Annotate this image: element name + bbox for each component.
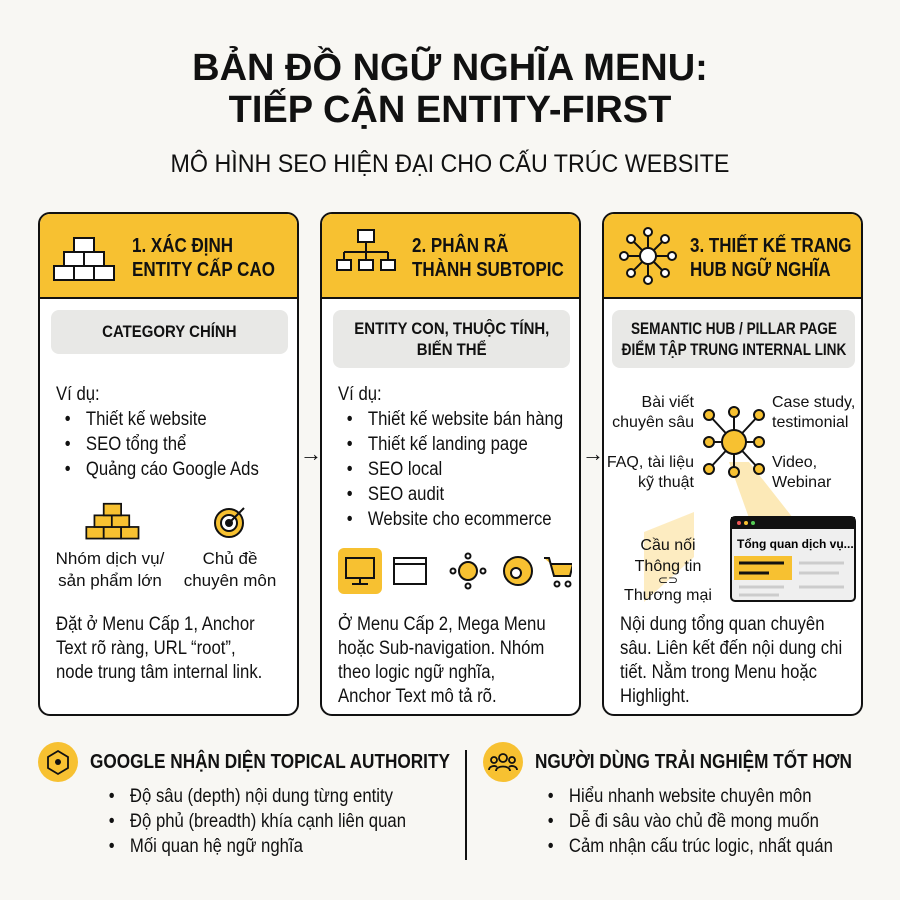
hub diagram: [607, 394, 856, 604]
caption: topic: chuyên môn: [184, 571, 276, 590]
examples 2: Thiết kế landing page: [368, 434, 528, 455]
label: semantic hub: SEMANTIC HUB / PILLAR PAGE: [631, 319, 837, 338]
hub diagram: Video,: [772, 454, 817, 471]
hub diagram: Cầu nối: [640, 537, 696, 554]
hub diagram: Thương mại: [624, 587, 712, 604]
examples 2: Thiết kế website bán hàng: [368, 409, 563, 430]
examples 1: Thiết kế website: [86, 409, 207, 430]
panel: 1: [38, 212, 299, 716]
hub diagram: FAQ, tài liệu: [607, 454, 694, 471]
caption: groups: Nhóm dịch vụ/: [56, 549, 164, 568]
icon: users: [483, 742, 523, 782]
caption: groups: sản phẩm lớn: [58, 571, 162, 590]
header 2: [322, 214, 579, 299]
label: category: CATEGORY CHÍNH: [102, 322, 237, 341]
header text 3: 3. THIẾT KẾ TRANG: [690, 235, 852, 257]
label: semantic hub: ĐIỂM TẬP TRUNG INTERNAL LINK: [622, 340, 846, 359]
bullets: Mối quan hệ ngữ nghĩa: [130, 836, 303, 857]
examples 2: SEO local: [368, 459, 442, 480]
header text 2: THÀNH SUBTOPIC: [412, 259, 564, 281]
caption: topic: Chủ đề: [203, 549, 257, 568]
arrow 2: →: [582, 441, 604, 466]
hub diagram: testimonial: [772, 414, 848, 431]
note 1: node trung tâm internal link.: [56, 662, 262, 683]
panel: 2: [320, 212, 581, 716]
note 1: Đặt ở Menu Cấp 1, Anchor: [56, 614, 255, 635]
icon: hierarchy: [336, 229, 396, 271]
label: entity con: [333, 310, 570, 368]
note 2: theo logic ngữ nghĩa,: [338, 662, 495, 683]
examples 1: Ví dụ:: [56, 384, 100, 405]
icon: target: [214, 507, 245, 538]
title: [192, 46, 708, 131]
header 1: [40, 214, 297, 299]
note 3: [620, 614, 842, 707]
hub diagram: ⊂⊃: [658, 573, 678, 587]
examples 2: [338, 384, 563, 530]
header text 2: [412, 234, 564, 281]
header text 1: [132, 234, 275, 281]
bullets: Cảm nhận cấu trúc logic, nhất quán: [569, 836, 833, 857]
title: BẢN ĐỒ NGỮ NGHĨA MENU:: [192, 47, 708, 89]
header text 3: [690, 234, 852, 281]
examples 1: Quảng cáo Google Ads: [86, 459, 259, 480]
icon: network: [619, 227, 677, 285]
header 3: [604, 214, 861, 299]
examples 2: Website cho ecommerce: [368, 509, 552, 530]
heading: NGƯỜI DÙNG TRẢI NGHIỆM TỐT HƠN: [535, 751, 852, 773]
label: entity con: ENTITY CON, THUỘC TÍNH,: [354, 319, 549, 338]
note 3: Highlight.: [620, 686, 690, 707]
label: entity con: BIẾN THỂ: [417, 340, 486, 359]
note 3: tiết. Nằm trong Menu hoặc: [620, 662, 817, 683]
title: TIẾP CẬN ENTITY-FIRST: [229, 89, 671, 131]
note 2: [338, 613, 546, 707]
label: semantic hub: [612, 310, 855, 368]
header text 1: ENTITY CẤP CAO: [132, 259, 275, 281]
caption: groups: [56, 549, 164, 590]
hub diagram: Webinar: [772, 474, 832, 491]
header text 2: 2. PHÂN RÃ: [412, 235, 508, 257]
arrow 1: →: [300, 441, 322, 466]
label: category: [51, 310, 288, 354]
hub diagram: Case study,: [772, 394, 855, 411]
bullets: Dễ đi sâu vào chủ đề mong muốn: [569, 811, 819, 832]
bullets: Độ phủ (breadth) khía cạnh liên quan: [130, 811, 406, 832]
note 2: Ở Menu Cấp 2, Mega Menu: [338, 614, 546, 635]
section: user experience: [483, 742, 852, 857]
note 3: Nội dung tổng quan chuyên: [620, 614, 825, 635]
subtitle: MÔ HÌNH SEO HIỆN ĐẠI CHO CẤU TRÚC WEBSITE: [171, 150, 729, 178]
examples 1: SEO tổng thể: [86, 434, 186, 455]
heading: GOOGLE NHẬN DIỆN TOPICAL AUTHORITY: [90, 751, 450, 773]
note 3: sâu. Liên kết đến nội dung chi: [620, 638, 842, 659]
icon: gold blocks: [85, 502, 140, 540]
header text 1: 1. XÁC ĐỊNH: [132, 235, 233, 257]
bullets: [109, 786, 406, 857]
note 2: Anchor Text mô tả rõ.: [338, 686, 497, 707]
icon: blocks: [53, 237, 115, 281]
hub diagram: kỹ thuật: [638, 474, 695, 491]
icon: authority: [38, 742, 78, 782]
panel: 3: [602, 212, 863, 716]
hub diagram: Tổng quan dịch vụ...: [737, 537, 854, 551]
section: topical authority: [38, 742, 450, 857]
bullets: Hiểu nhanh website chuyên môn: [569, 786, 812, 807]
examples 1: [56, 384, 259, 480]
icon row: [338, 548, 572, 594]
hub diagram: Bài viết: [642, 394, 695, 411]
note 1: [56, 614, 262, 683]
bullets: [548, 786, 833, 857]
hub diagram: chuyên sâu: [612, 414, 694, 431]
caption: topic: [184, 549, 276, 590]
examples 2: Ví dụ:: [338, 384, 382, 405]
note 1: Text rõ ràng, URL “root”,: [56, 638, 236, 659]
header text 3: HUB NGỮ NGHĨA: [690, 259, 831, 281]
examples 2: SEO audit: [368, 484, 444, 505]
hub diagram: Thông tin: [635, 558, 701, 575]
bullets: Độ sâu (depth) nội dung từng entity: [130, 786, 393, 807]
note 2: hoặc Sub-navigation. Nhóm: [338, 638, 544, 659]
